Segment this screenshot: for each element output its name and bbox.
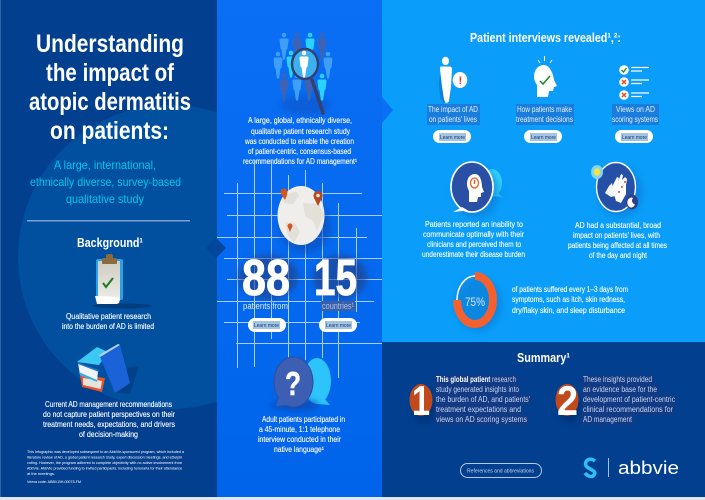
divider bbox=[27, 220, 190, 222]
fine print: This infographic was developed subsequent to an AbbVie-sponsored program, which included a bbox=[27, 449, 185, 454]
fine print: Veeva code: ABBV-BH-00075-FM bbox=[27, 479, 81, 484]
subtitle: ethnically diverse, survey-based bbox=[30, 175, 181, 189]
text: broad impact: impact on patients' lives, with bbox=[573, 231, 660, 240]
icon: clipboard bbox=[92, 254, 152, 308]
chart: 75% donut bbox=[455, 276, 501, 331]
text: qualitative research bbox=[62, 312, 154, 331]
text: broad impact: patients being affected at all times bbox=[568, 241, 667, 250]
stat: 88 patients: 88 bbox=[242, 249, 290, 306]
logo: abbvie bbox=[585, 457, 679, 478]
text: summary point 1: the burden of AD, and patients' bbox=[436, 395, 530, 404]
text: study description: A large, global, ethnically diverse, bbox=[248, 116, 352, 125]
arrow: centre to right bbox=[382, 97, 393, 123]
panel: summary background bbox=[382, 342, 705, 497]
text: current recommendations: do not capture patient perspectives on their bbox=[43, 410, 175, 419]
text: study description: recommendations for AD management¹ bbox=[243, 157, 357, 166]
text: communication: Patients reported an inability to bbox=[425, 220, 523, 229]
panel: left background bbox=[0, 0, 217, 497]
icon: person with alert: ! bbox=[458, 75, 462, 87]
button: learn more bbox=[524, 130, 562, 143]
icon: scoring checklist bbox=[619, 65, 649, 100]
heading: background: Background¹ bbox=[77, 236, 143, 250]
subtitle: qualitative study bbox=[66, 192, 144, 206]
button: learn more: Learn more bbox=[326, 323, 351, 329]
icon: people with magnifying glass bbox=[274, 33, 332, 115]
button: learn more: Learn more bbox=[254, 323, 279, 329]
arrow: left to centre bbox=[206, 238, 226, 258]
icon: speech bubbles with question mark bbox=[271, 357, 331, 411]
text: study description: was conducted to enable the creation bbox=[244, 137, 354, 146]
icon: globe with pins bbox=[278, 186, 331, 253]
text: qualitative research: Qualitative patient research bbox=[66, 312, 151, 321]
title: atopic dermatitis bbox=[29, 88, 191, 116]
stat: 15 countries: countries¹ bbox=[322, 301, 354, 311]
text: broad impact: of the day and night bbox=[589, 251, 648, 260]
text: summary point 2: These insights provided bbox=[583, 375, 652, 384]
fine print: at the meetings. bbox=[27, 471, 55, 476]
text: scoring systems: scoring systems bbox=[612, 115, 658, 124]
heading: summary: Summary¹ bbox=[517, 351, 570, 365]
text: communication: underestimate their disease burden bbox=[422, 250, 525, 259]
button: learn more bbox=[319, 318, 357, 332]
fine print: voting. However, the program adhered to complete objectivity with no active involvement from bbox=[27, 460, 182, 465]
text: current recommendations: Current AD management recommendations bbox=[45, 400, 172, 409]
button: learn more: Learn more bbox=[622, 135, 647, 141]
fine print: AbbVie. AbbVie provided funding to invited participants, including honoraria for their attendance bbox=[27, 466, 182, 470]
icon: hands with sun and moon bbox=[591, 162, 642, 217]
text: interview details: a 45-minute, 1:1 telephone bbox=[259, 425, 340, 434]
icon: speech bubbles with question mark: ? bbox=[285, 365, 301, 402]
text: interview details: Adult patients participated in bbox=[262, 415, 345, 424]
number badge: 1: 1 bbox=[412, 377, 430, 424]
footer strip bbox=[0, 497, 705, 500]
icon: books bbox=[77, 344, 139, 394]
text: summary point 1 bbox=[435, 375, 531, 425]
button: learn more bbox=[433, 130, 471, 143]
text: impact of AD bbox=[427, 104, 480, 125]
text: current recommendations bbox=[43, 400, 175, 439]
button: learn more: Learn more bbox=[531, 135, 556, 141]
text: scoring systems: Views on AD bbox=[616, 105, 655, 114]
stat: 88 patients: patients from bbox=[243, 301, 288, 311]
button: learn more: Learn more bbox=[440, 135, 465, 141]
text: summary point 2: clinical recommendations for bbox=[583, 405, 673, 414]
fine print bbox=[27, 449, 185, 484]
text: broad impact: AD had a substantial, broad bbox=[575, 221, 661, 230]
fine print: literature review of AD, a global patient research study, expert discussion meetings, and eDelphi bbox=[27, 454, 182, 460]
stat: 15 countries: 15 bbox=[314, 249, 357, 306]
title: Understanding bbox=[36, 30, 184, 58]
text: summary point 1: This global patient research bbox=[436, 375, 516, 384]
text: symptoms: dry/flaky skin, and sleep disturbance bbox=[512, 306, 625, 315]
text: treatment decisions bbox=[516, 104, 574, 125]
title bbox=[29, 30, 191, 145]
icon: head in speech bubble bbox=[451, 162, 502, 218]
logo: abbvie: abbvie bbox=[618, 457, 679, 478]
text: summary point 1: treatment expectations and bbox=[436, 405, 521, 414]
text: communication: clinicians and perceived them to bbox=[427, 240, 521, 249]
button: learn more bbox=[248, 318, 286, 332]
button: learn more bbox=[615, 130, 653, 143]
number badge: 2: 2 bbox=[557, 377, 578, 424]
icon: person with alert bbox=[439, 57, 467, 104]
title: the impact of bbox=[46, 59, 175, 87]
text: interview details bbox=[258, 415, 345, 454]
text: scoring systems bbox=[612, 104, 659, 125]
panel: right background bbox=[382, 0, 705, 342]
text: interview details: native language¹ bbox=[274, 445, 324, 454]
panel: centre background bbox=[217, 0, 382, 497]
text: treatment decisions: treatment decisions bbox=[516, 115, 573, 124]
text: qualitative research: into the burden of AD is limited bbox=[62, 322, 154, 331]
title: on patients: bbox=[50, 117, 169, 145]
chart: 75% donut: 75% bbox=[465, 297, 485, 309]
text: summary point 2: development of patient-centric bbox=[583, 395, 675, 404]
heading: patient interviews: Patient interviews revealed¹,²: bbox=[470, 30, 621, 45]
button: references and abbreviations bbox=[460, 464, 542, 478]
text: summary point 2: AD management bbox=[583, 415, 633, 424]
text: impact of AD: on patients' lives bbox=[429, 115, 477, 124]
text: current recommendations: treatment needs, expectations, and drivers bbox=[43, 420, 175, 429]
text: symptoms: symptoms, such as itch, skin redness, bbox=[512, 295, 625, 304]
button: references and abbreviations: References and abbreviations bbox=[467, 468, 534, 474]
text: treatment decisions: How patients make bbox=[517, 105, 572, 114]
text: study description: of patient-centric, consensus-based bbox=[248, 147, 351, 156]
subtitle bbox=[30, 158, 181, 206]
text: current recommendations: of decision-making bbox=[79, 430, 138, 439]
text: summary point 2: an evidence base for the bbox=[583, 385, 657, 394]
icon: head with check bbox=[534, 56, 557, 97]
text: summary point 1: study generated insights into bbox=[436, 385, 519, 394]
text: symptoms bbox=[512, 285, 628, 315]
text: communication bbox=[422, 220, 525, 259]
text: interview details: interview conducted in their bbox=[258, 435, 341, 444]
subtitle: A large, international, bbox=[54, 158, 156, 172]
text: summary point 2 bbox=[582, 375, 676, 425]
text: summary point 1: views on AD scoring systems bbox=[436, 415, 527, 424]
text: study description bbox=[243, 116, 357, 166]
text: study description: qualitative patient research study bbox=[251, 127, 350, 136]
text: symptoms: of patients suffered every 1–3 days from bbox=[512, 285, 628, 294]
text: communication: communicate optimally with their bbox=[423, 230, 524, 239]
text: impact of AD: The impact of AD bbox=[428, 105, 478, 114]
text: broad impact bbox=[568, 221, 667, 260]
